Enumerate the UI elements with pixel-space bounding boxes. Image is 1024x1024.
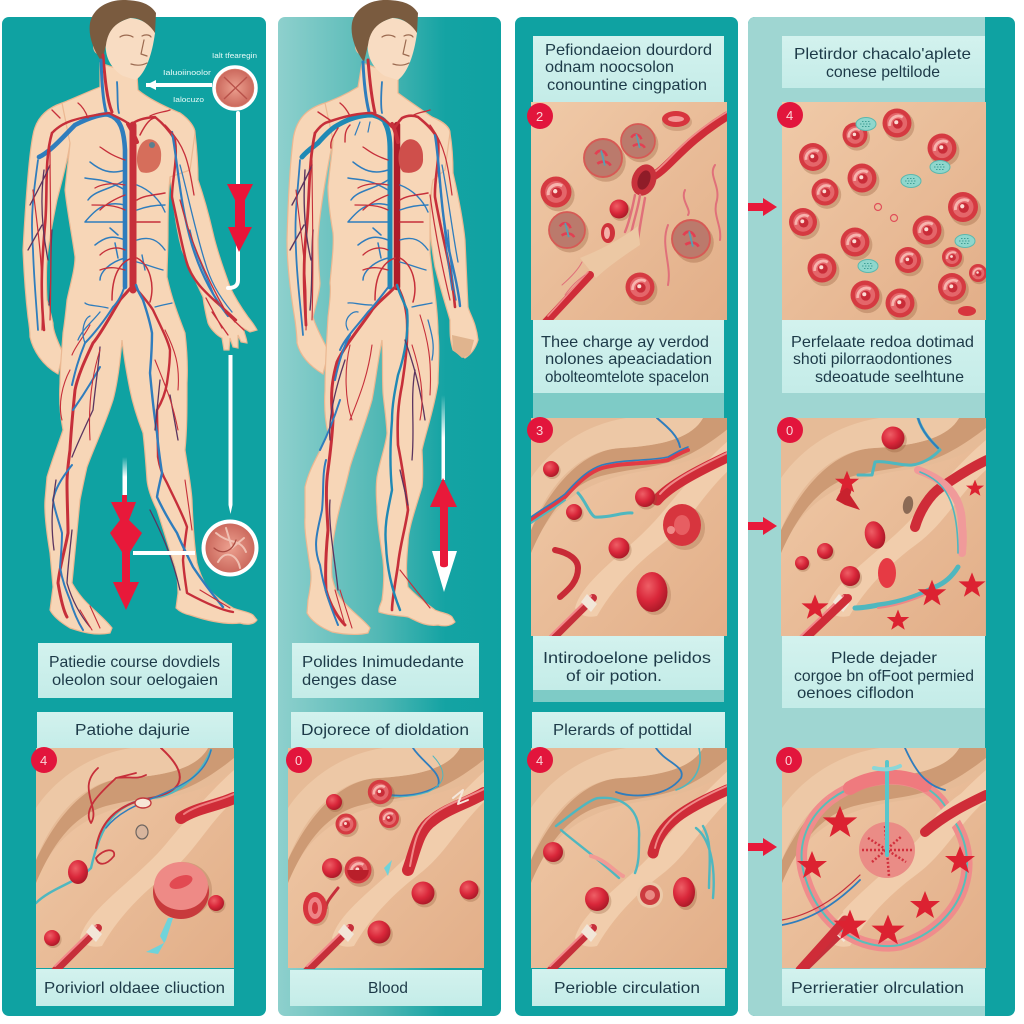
- illustration: scattered cells: [782, 102, 986, 320]
- card caption: [36, 969, 234, 1006]
- veins: [290, 60, 460, 628]
- card heading: [532, 712, 725, 748]
- head: [368, 18, 417, 80]
- body skin: [23, 63, 257, 634]
- card caption: Thee charge ay verdod: [541, 334, 709, 351]
- hair: [352, 0, 418, 62]
- card: step F: [776, 747, 986, 1006]
- leg vessels: [58, 285, 133, 617]
- card caption: [782, 320, 985, 393]
- card caption: oenoes ciflodon: [797, 685, 914, 702]
- hair: [90, 0, 156, 62]
- panel: anatomy left: [2, 0, 266, 1016]
- arrow: right side flow: [227, 113, 253, 288]
- card caption: Plede dejader: [831, 650, 938, 667]
- card caption: Intirodoelone pelidos: [543, 650, 711, 667]
- badge: step number: 3: [536, 423, 543, 438]
- badge: step number: 0: [785, 753, 792, 768]
- callout: upper tissue circle: [146, 53, 257, 109]
- arrow: to middle card: [748, 517, 777, 535]
- badge: step number: 4: [536, 753, 543, 768]
- card caption: Perrieratier olrculation: [791, 980, 964, 997]
- card caption: [782, 636, 985, 708]
- card caption: [782, 969, 985, 1006]
- illustration: red cells around vessel: [288, 748, 484, 969]
- card: step C: [527, 712, 729, 1006]
- face features: [382, 35, 413, 65]
- arrow: double direction: [430, 395, 457, 592]
- card caption: Blood: [368, 980, 408, 997]
- hand: [452, 335, 474, 358]
- card: step 2: [286, 712, 486, 1006]
- figure: human body with vessels: [23, 0, 257, 634]
- panel: steps column 4: [748, 17, 1015, 1016]
- leg vessels: [326, 285, 397, 625]
- text box: intro: Patiedie course dovdiels: [49, 654, 220, 671]
- badge: step number: 4: [786, 108, 793, 123]
- badge: step number: 2: [536, 109, 543, 124]
- illustration: teal nerves: [531, 748, 727, 969]
- arrow: to upper card: [748, 198, 777, 216]
- card heading: [533, 36, 724, 102]
- card heading: Dojorece of dioldation: [301, 722, 469, 739]
- badge: step number: [286, 747, 312, 773]
- card heading: conese peltilode: [826, 64, 940, 81]
- body skin: [287, 63, 478, 635]
- figure: second human body: [287, 0, 478, 635]
- text box: intro: [38, 643, 232, 698]
- card heading: [782, 36, 985, 88]
- callout: upper tissue circle: Ialocuzo: [173, 97, 204, 104]
- card caption: shoti pilorraodontiones: [793, 351, 952, 368]
- card: step B: [527, 417, 729, 690]
- card caption: nolones apeaciadation: [545, 351, 712, 368]
- card caption: obolteomtelote spacelon: [545, 369, 709, 386]
- illustration: vessel with red stars: [781, 418, 986, 636]
- card: step E: [777, 417, 987, 708]
- text box: intro: Polides Inimudedante: [302, 654, 464, 671]
- badge: step number: [777, 102, 803, 128]
- head: [106, 18, 155, 80]
- card caption: Perioble circulation: [554, 980, 700, 997]
- card caption: Poriviorl oldaee cliuction: [44, 980, 225, 997]
- illustration: circulation ring: [782, 748, 986, 969]
- illustration: vessel with cells: [531, 418, 727, 636]
- badge: step number: [31, 747, 57, 773]
- card heading: Plerards of pottidal: [553, 722, 692, 739]
- callout: upper tissue circle: Ialuoiinoolor: [163, 70, 212, 77]
- card caption: [533, 636, 724, 690]
- card caption: [290, 970, 482, 1006]
- card heading: [37, 712, 233, 748]
- badge: step number: [527, 103, 553, 129]
- illustration: vessel with large cell: [36, 748, 234, 969]
- panel: steps column 3: [515, 17, 738, 1016]
- arrow: to lower card: [748, 838, 777, 856]
- badge: step number: [776, 747, 802, 773]
- callout: lower tissue circle: [133, 355, 258, 576]
- card heading: Patiohe dajurie: [75, 722, 190, 739]
- card caption: [532, 969, 725, 1006]
- card heading: Pefiondaeion dourdord: [545, 42, 712, 59]
- badge: step number: 0: [786, 423, 793, 438]
- illustration: ruptured vessel: [531, 102, 727, 320]
- card caption: corgoe bn ofFoot permied: [794, 668, 974, 685]
- text box: intro: [292, 643, 479, 698]
- card heading: conountine cingpation: [547, 77, 707, 94]
- badge: step number: 4: [40, 753, 47, 768]
- face features: [120, 35, 151, 65]
- card: step D: [777, 36, 989, 393]
- panel: anatomy right: [278, 0, 501, 1016]
- torso branches: [85, 162, 125, 280]
- torso branches: [348, 162, 388, 280]
- callout: upper tissue circle: Ialt tfearegin: [212, 53, 257, 60]
- badge: step number: [527, 417, 553, 443]
- card caption: Perfelaate redoa dotimad: [791, 334, 974, 351]
- heart: [392, 124, 423, 173]
- card caption: of oir potion.: [566, 668, 662, 685]
- veins: [28, 55, 244, 630]
- card: step 1: [31, 712, 234, 1006]
- text box: intro: oleolon sour oelogaien: [52, 672, 218, 689]
- badge: step number: 0: [295, 753, 302, 768]
- card heading: odnam noocsolon: [545, 59, 674, 76]
- card heading: [291, 712, 483, 748]
- card: step A: [527, 36, 727, 393]
- badge: step number: [777, 417, 803, 443]
- card heading: Pletirdor chacalo'aplete: [794, 46, 971, 63]
- arrow: lower leg flow: [110, 457, 142, 610]
- text box: intro: denges dase: [302, 672, 397, 689]
- card caption: [533, 320, 724, 393]
- badge: step number: [527, 747, 553, 773]
- heart: [128, 124, 161, 173]
- card caption: sdeoatude seelhtune: [815, 369, 964, 386]
